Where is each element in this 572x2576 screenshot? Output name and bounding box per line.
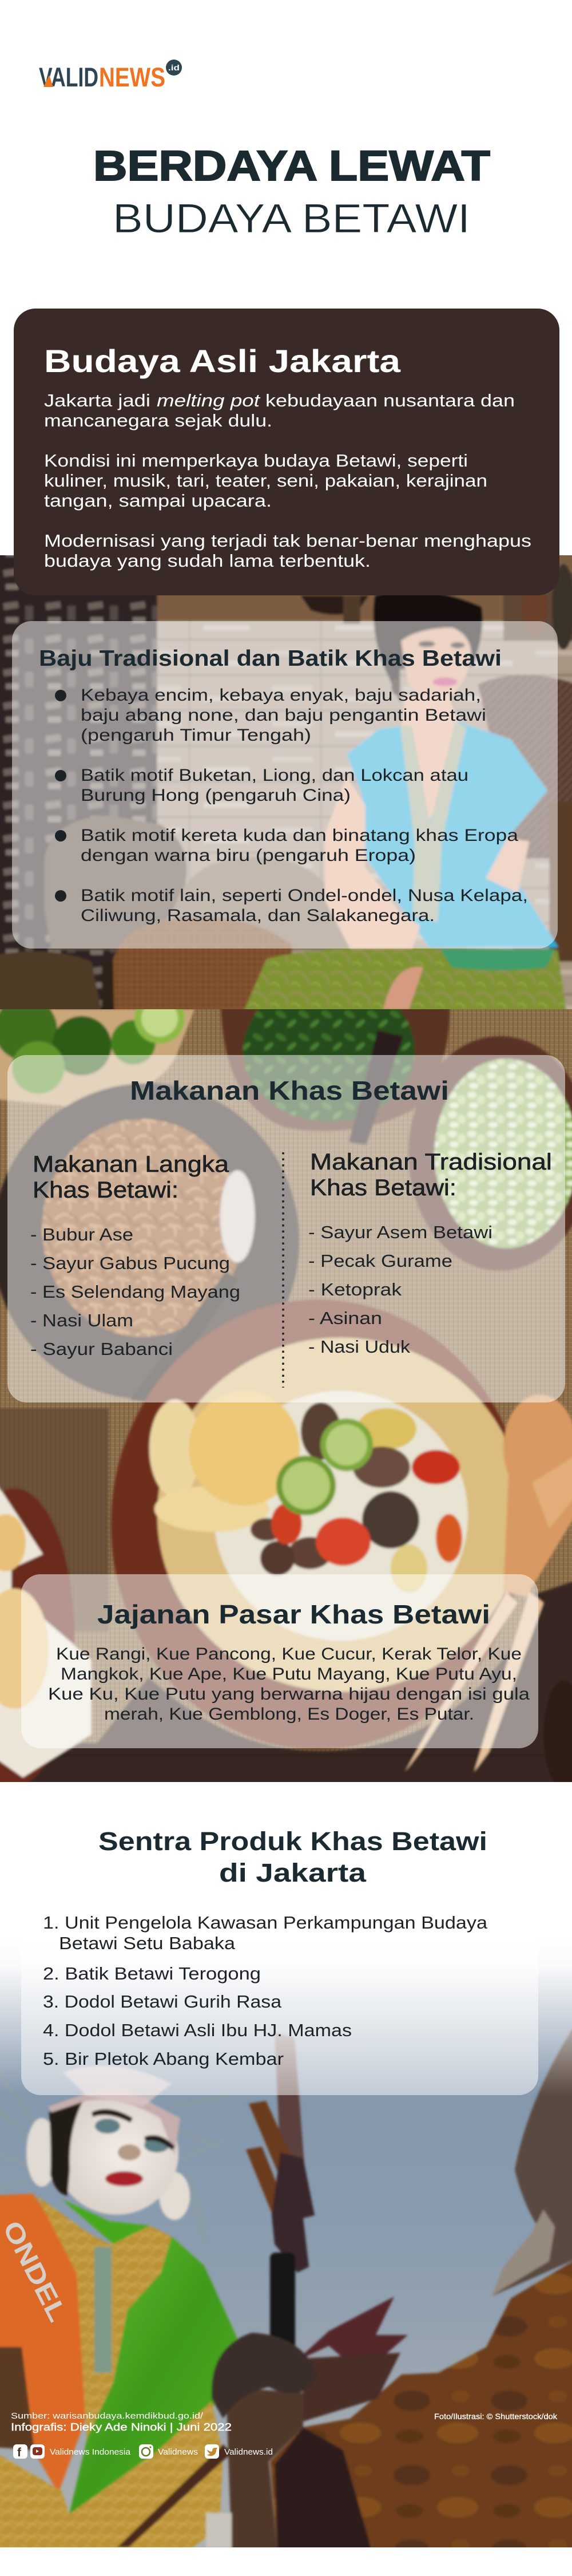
title: BERDAYA LEWAT [93, 142, 490, 189]
icon: youtube [30, 2444, 45, 2459]
source credits: Infografis: Dieky Ade Ninoki | Juni 2022 [11, 2421, 232, 2433]
photo: Betawi food [0, 979, 572, 1789]
panel: Makanan Khas Betawi [7, 1055, 565, 1402]
column: makanan langka: Khas Betawi: [33, 1178, 178, 1203]
logo: Validnews.id: VALID [39, 62, 98, 92]
heading: Sentra Produk [98, 1827, 487, 1887]
intro text: kebudayaan nusantara dan [265, 390, 515, 410]
bullet list: Batik motif lain, seperti Ondel-ondel, Nusa Kelapa, [81, 886, 528, 905]
snack list: Kue Ku, Kue Putu yang berwarna hijau dengan isi gula [48, 1685, 530, 1704]
intro text: mancanegara sejak dulu. [44, 410, 272, 430]
intro text: budaya yang sudah lama terbentuk. [44, 551, 371, 571]
heading: Sentra Produk: Sentra Produk Khas Betawi [98, 1827, 487, 1856]
icon: twitter [205, 2444, 219, 2459]
numbered list: 4. Dodol Betawi Asli Ibu HJ. Mamas [43, 2020, 352, 2040]
bullet list: Batik motif kereta kuda dan binatang khas Eropa [81, 826, 518, 845]
column: makanan langka: - Es Selendang Mayang [30, 1282, 240, 1302]
bullet list: (pengaruh Timur Tengah) [81, 726, 311, 745]
heading: Budaya Asli Jakarta [44, 343, 401, 379]
social media row: Validnews [158, 2447, 198, 2457]
panel: Baju Tradisional dan Batik [12, 621, 558, 949]
heading: Sentra Produk: di Jakarta [219, 1858, 367, 1887]
title [93, 142, 490, 242]
bullet list: baju abang none, dan baju pengantin Betawi [81, 706, 486, 725]
numbered list: 1. Unit Pengelola Kawasan Perkampungan Budaya [43, 1913, 488, 1933]
column: makanan langka: - Nasi Ulam [30, 1310, 133, 1330]
social media row: Validnews Indonesia [50, 2447, 131, 2457]
column: makanan tradisional: Makanan Tradisional [310, 1149, 552, 1175]
column: makanan langka: - Sayur Babanci [30, 1339, 173, 1359]
intro text: Jakarta jadi [44, 390, 150, 410]
column: makanan tradisional: - Asinan [308, 1308, 382, 1328]
heading: Makanan Khas Betawi [130, 1076, 449, 1105]
photo credit: Foto/Ilustrasi: © Shutterstock/dok [434, 2412, 558, 2421]
photo: woman in kebaya [0, 544, 572, 1019]
intro text [44, 390, 531, 571]
numbered list: 2. Batik Betawi Terogong [43, 1963, 261, 1984]
icon: facebook [13, 2444, 27, 2459]
bullet list: Kebaya encim, kebaya enyak, baju sadariah, [81, 686, 481, 705]
snack list: Kue Rangi, Kue Pancong, Kue Cucur, Kerak Telor, Kue [56, 1645, 522, 1664]
column: makanan tradisional: - Ketoprak [308, 1279, 402, 1299]
photo: ondel-ondel and man [0, 1935, 572, 2550]
bullet list: Ciliwung, Rasamala, dan Salakanegara. [81, 906, 435, 925]
source credits [11, 2411, 232, 2433]
intro text: tangan, sampai upacara. [44, 491, 272, 511]
column: makanan tradisional [308, 1149, 552, 1357]
intro text: melting pot [157, 390, 261, 410]
dotted divider [282, 1152, 284, 1388]
numbered list: 5. Bir Pletok Abang Kembar [43, 2049, 284, 2069]
column: makanan tradisional: - Pecak Gurame [308, 1251, 452, 1271]
column: makanan langka: Makanan Langka [33, 1152, 229, 1177]
numbered list [43, 1913, 488, 2069]
numbered list: 3. Dodol Betawi Gurih Rasa [43, 1992, 282, 2012]
logo: Validnews.id [39, 60, 182, 92]
panel: Sentra Produk list [21, 1901, 538, 2095]
column: makanan langka [30, 1152, 240, 1359]
column: makanan tradisional: - Nasi Uduk [308, 1337, 411, 1357]
heading: Jajanan Pasar Khas Betawi [97, 1599, 490, 1629]
snack list: merah, Kue Gemblong, Es Doger, Es Putar. [104, 1705, 474, 1724]
title: BUDAYA BETAWI [113, 196, 470, 242]
snack list [48, 1645, 530, 1724]
bullet list [55, 686, 528, 925]
source credits: Sumber: warisanbudaya.kemdikbud.go.id/ [11, 2411, 204, 2421]
social media row [13, 2444, 273, 2459]
intro text: Modernisasi yang terjadi tak benar-benar menghapus [44, 531, 531, 551]
panel: Jajanan Pasar Khas Betawi [21, 1574, 538, 1748]
numbered list: Betawi Setu Babaka [59, 1933, 236, 1953]
icon: facebook: f [17, 2446, 22, 2459]
icon: instagram [139, 2444, 153, 2459]
bullet list: Batik motif Buketan, Liong, dan Lokcan atau [81, 766, 468, 785]
intro text: kuliner, musik, tari, teater, seni, pakaian, kerajinan [44, 471, 487, 491]
bullet list: dengan warna biru (pengaruh Eropa) [81, 846, 416, 865]
column: makanan langka: - Sayur Gabus Pucung [30, 1253, 230, 1273]
intro text: Kondisi ini memperkaya budaya Betawi, seperti [44, 451, 468, 471]
social media row: Validnews.id [224, 2447, 273, 2457]
column: makanan tradisional: Khas Betawi: [310, 1175, 456, 1200]
column: makanan tradisional: - Sayur Asem Betawi [308, 1222, 492, 1242]
panel: Budaya Asli Jakarta [14, 309, 559, 595]
logo: Validnews.id: NEWS [99, 62, 165, 92]
bullet list: Burung Hong (pengaruh Cina) [81, 786, 351, 805]
logo: Validnews.id: .id [168, 63, 180, 72]
heading: Baju Tradisional dan Batik Khas Betawi [39, 646, 502, 671]
snack list: Mangkok, Kue Ape, Kue Putu Mayang, Kue Putu Ayu, [61, 1665, 517, 1684]
column: makanan langka: - Bubur Ase [30, 1224, 133, 1244]
